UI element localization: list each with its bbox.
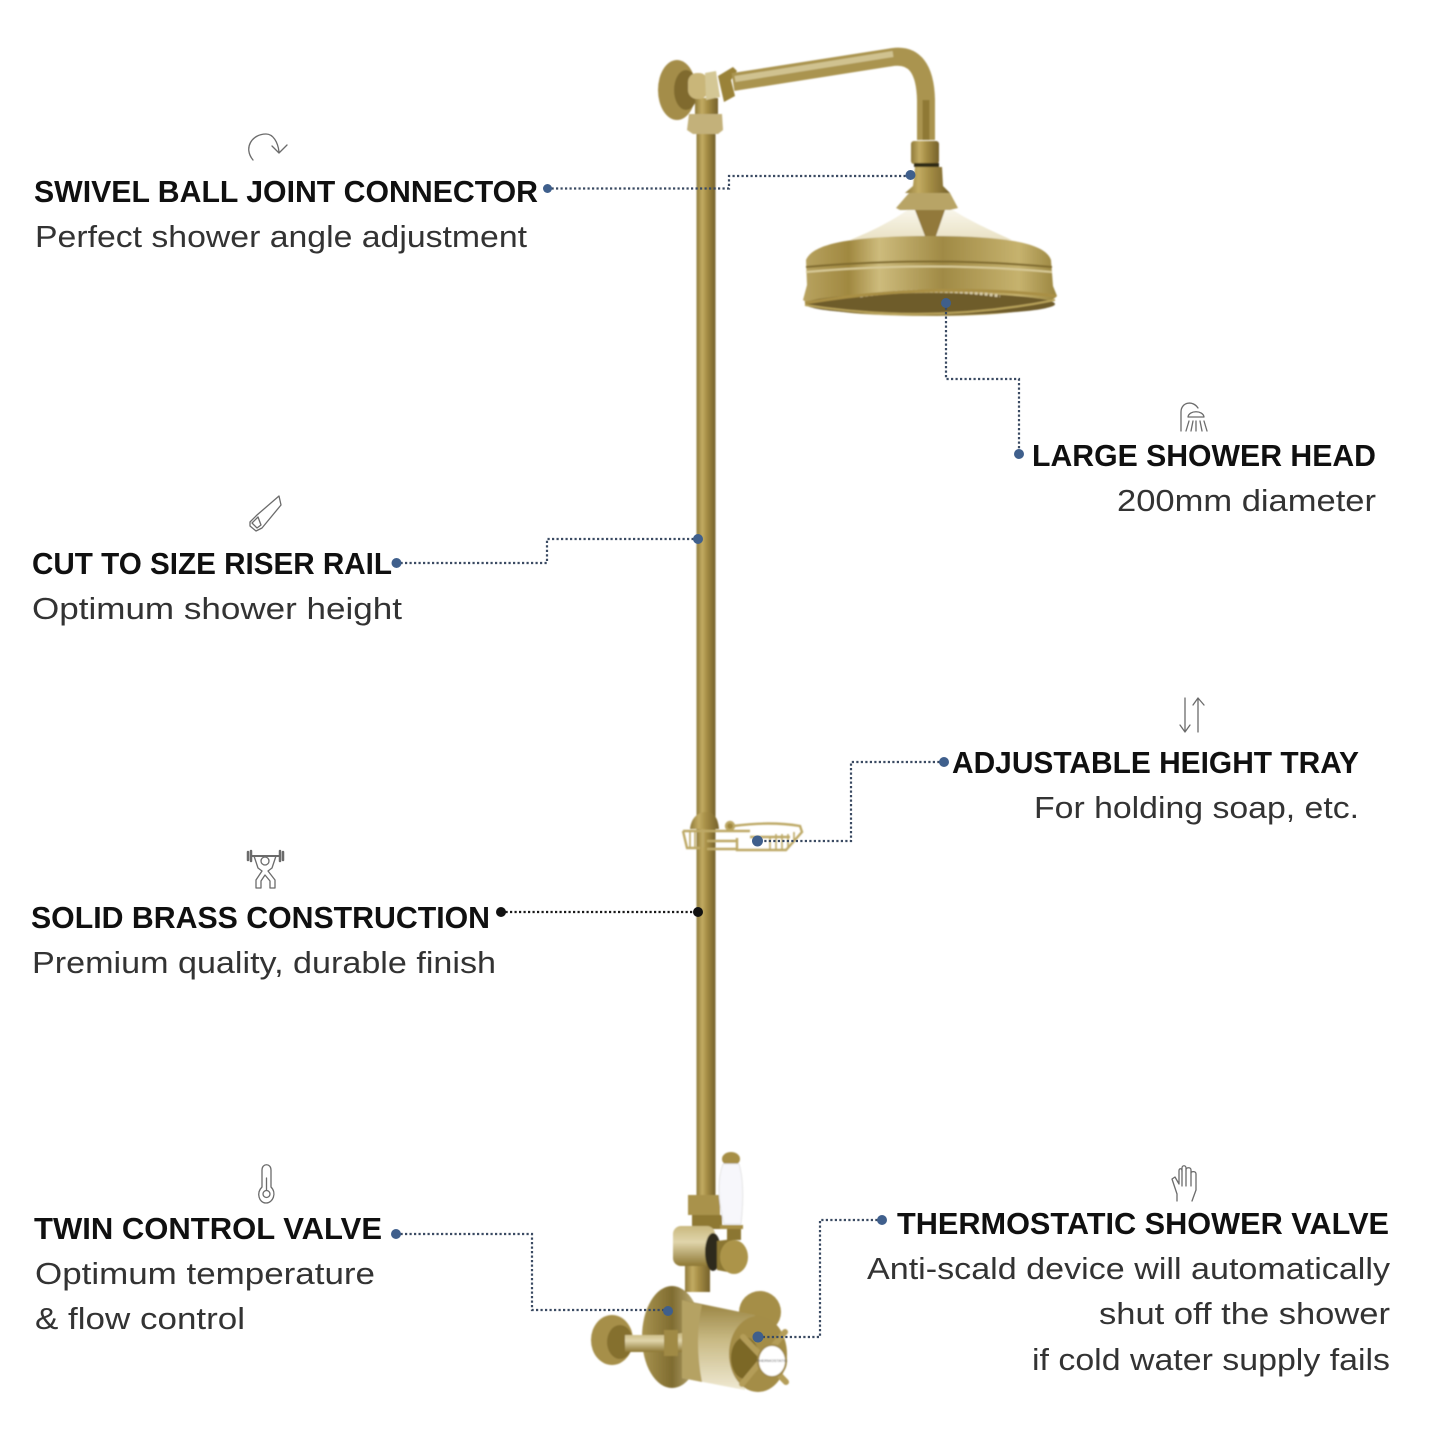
icon: saw: [250, 496, 281, 531]
thermostatic valve body: [625, 1286, 787, 1392]
swivel ball joint: [687, 67, 737, 134]
left wall supply pipe: [591, 1315, 633, 1365]
label: solid brass construction: [31, 900, 496, 980]
connector: riser rail: [392, 534, 703, 568]
cross handle: [742, 1332, 788, 1384]
cross handle: THERMOSTATIC: [757, 1358, 788, 1363]
label: adjustable height tray: [952, 745, 1359, 825]
porcelain lever handle: [719, 1152, 743, 1229]
label: swivel ball joint connector: Perfect shower angle adjustment: [35, 219, 527, 254]
label: large shower head: LARGE SHOWER HEAD: [1032, 438, 1376, 473]
shower arm: [733, 57, 926, 140]
label: twin control valve: Optimum temperature: [35, 1256, 375, 1291]
connector: large shower head: [941, 298, 1024, 459]
icon: shower: [1181, 403, 1207, 431]
label: thermostatic shower valve: [867, 1206, 1391, 1377]
label: solid brass construction: SOLID BRASS CONSTRUCTION: [31, 900, 490, 935]
wall bracket plate: [658, 60, 696, 120]
label: cut to size riser rail: [32, 546, 402, 626]
connector: adjustable tray: [752, 757, 949, 846]
label: thermostatic shower valve: shut off the shower: [1099, 1296, 1390, 1331]
label: adjustable height tray: For holding soap, etc.: [1034, 790, 1359, 825]
connector: swivel ball joint: [543, 170, 916, 193]
icon: weightlifter: [248, 851, 283, 888]
shower product illustration: [591, 54, 1057, 1392]
soap tray: [683, 822, 802, 850]
label: twin control valve: & flow control: [35, 1301, 245, 1336]
connector: solid brass: [496, 907, 703, 917]
label: cut to size riser rail: CUT TO SIZE RISER RAIL: [32, 546, 392, 581]
icon: hand: [1172, 1166, 1196, 1201]
connector: twin control valve: [391, 1229, 673, 1316]
label: swivel ball joint connector: [34, 174, 538, 254]
label: thermostatic shower valve: THERMOSTATIC SHOWER VALVE: [897, 1206, 1389, 1241]
label: solid brass construction: Premium quality, durable finish: [32, 945, 496, 980]
label: swivel ball joint connector: SWIVEL BALL JOINT CONNECTOR: [34, 174, 538, 209]
shower head: [803, 141, 1057, 316]
icon: rotate arrow: [249, 134, 287, 160]
tray collar on rail: [690, 812, 719, 829]
icon: up and down arrows: [1180, 698, 1204, 732]
label: twin control valve: TWIN CONTROL VALVE: [34, 1211, 382, 1246]
icon: thermometer: [259, 1165, 274, 1203]
riser rail: [696, 130, 716, 1205]
label: thermostatic shower valve: if cold water supply fails: [1032, 1342, 1390, 1377]
label: large shower head: 200mm diameter: [1117, 483, 1376, 518]
label: large shower head: [1032, 438, 1376, 518]
label: cut to size riser rail: Optimum shower height: [32, 591, 402, 626]
upper valve block: [673, 1195, 748, 1292]
label: twin control valve: [34, 1211, 382, 1336]
label: thermostatic shower valve: Anti-scald device will automatically: [867, 1251, 1391, 1286]
label: adjustable height tray: ADJUSTABLE HEIGHT TRAY: [952, 745, 1359, 780]
connector: thermostatic valve: [752, 1215, 887, 1342]
